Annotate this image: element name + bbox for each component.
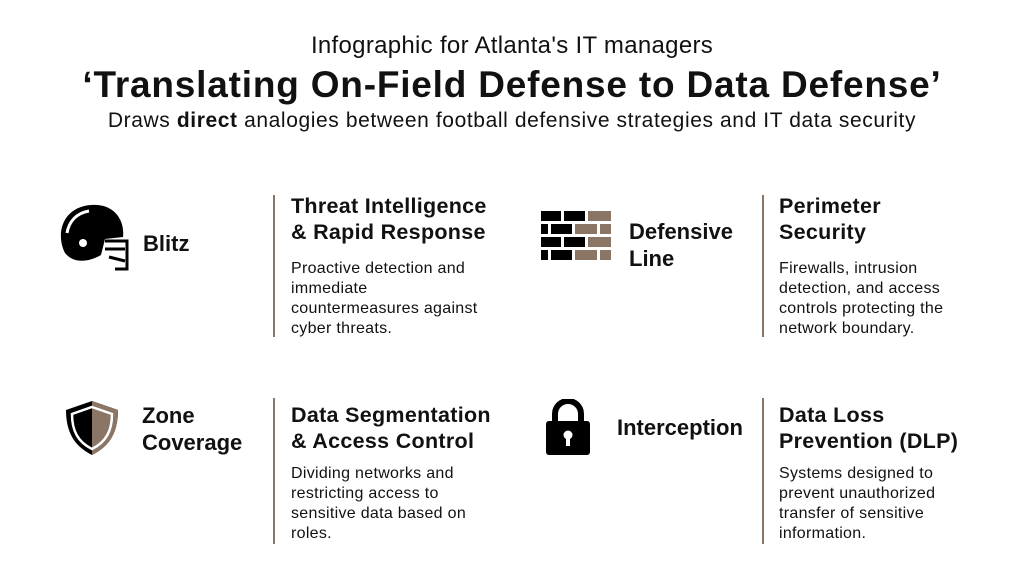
label — [142, 403, 242, 455]
heading — [291, 403, 491, 453]
heading: Data Loss — [779, 403, 884, 427]
panel: defensive line — [541, 194, 943, 337]
label: Interception — [617, 415, 743, 440]
heading: & Rapid Response — [291, 220, 486, 244]
label: Coverage — [142, 430, 242, 455]
label: Zone — [142, 403, 195, 428]
heading — [779, 403, 958, 453]
body: Firewalls, intrusion detection, and access controls protecting the network boundary. — [779, 260, 943, 337]
icon: padlock — [546, 399, 590, 455]
body: Proactive detection and immediate countermeasures against cyber threats. — [291, 260, 478, 337]
subtitle: Draws direct analogies between football defensive strategies and IT data security — [108, 109, 916, 132]
heading — [291, 194, 487, 244]
heading: Prevention (DLP) — [779, 429, 958, 453]
label: Line — [629, 246, 674, 271]
title: Infographic for Atlanta's IT managers — [311, 32, 713, 59]
heading: Perimeter — [779, 194, 881, 218]
panel: zone coverage — [66, 398, 491, 544]
label — [629, 219, 733, 271]
body: Systems designed to prevent unauthorized transfer of sensitive information. — [779, 465, 935, 542]
icon: brick wall — [541, 211, 611, 260]
heading — [779, 194, 881, 244]
label: Defensive — [629, 219, 733, 244]
label: Blitz — [143, 231, 189, 256]
heading: & Access Control — [291, 429, 474, 453]
icon: shield — [66, 401, 118, 455]
heading: Threat Intelligence — [291, 194, 487, 218]
heading: Security — [779, 220, 866, 244]
icon: helmet — [60, 204, 128, 270]
heading: Data Segmentation — [291, 403, 491, 427]
panel: interception — [546, 398, 958, 544]
main heading: ‘Translating On-Field Defense to Data Defense’ — [82, 64, 942, 105]
body: Dividing networks and restricting access to sensitive data based on roles. — [291, 465, 466, 542]
panel: blitz — [60, 194, 487, 337]
